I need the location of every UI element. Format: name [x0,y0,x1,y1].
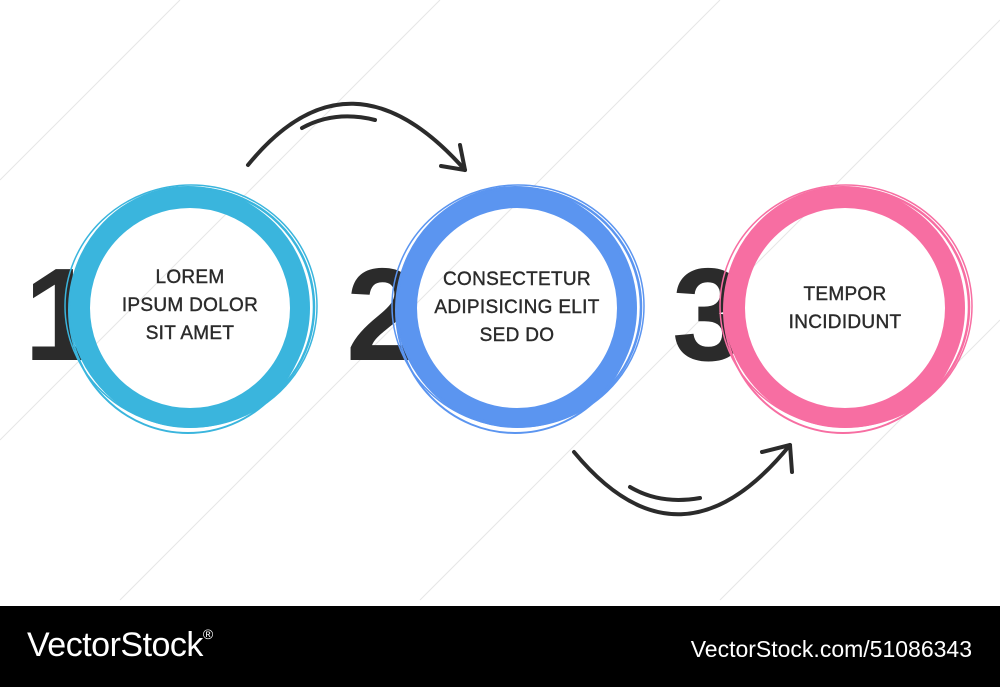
number 1: 1 [24,241,97,388]
text 2 [434,269,600,346]
text 1: IPSUM DOLOR [122,295,258,316]
circle 2 [392,185,644,433]
text 2: CONSECTETUR [443,269,591,290]
text 3: TEMPOR [803,284,887,305]
text 3 [789,284,901,333]
text 2: ADIPISICING ELIT [434,297,600,318]
arrow bottom [574,445,792,514]
text 1: SIT AMET [146,323,234,344]
text 3: INCIDIDUNT [789,312,901,333]
circle 3 [720,185,972,433]
footer bar [0,606,1000,687]
text 2: SED DO [480,325,554,346]
number 3: 3 [672,241,745,388]
number 2: 2 [346,241,419,388]
footer brand: VectorStock® [27,626,213,664]
text 1: LOREM [155,267,225,288]
footer url: VectorStock.com/51086343 [691,636,972,662]
text 1 [122,267,258,344]
circle 1 [65,185,317,433]
arrow top [248,104,465,170]
